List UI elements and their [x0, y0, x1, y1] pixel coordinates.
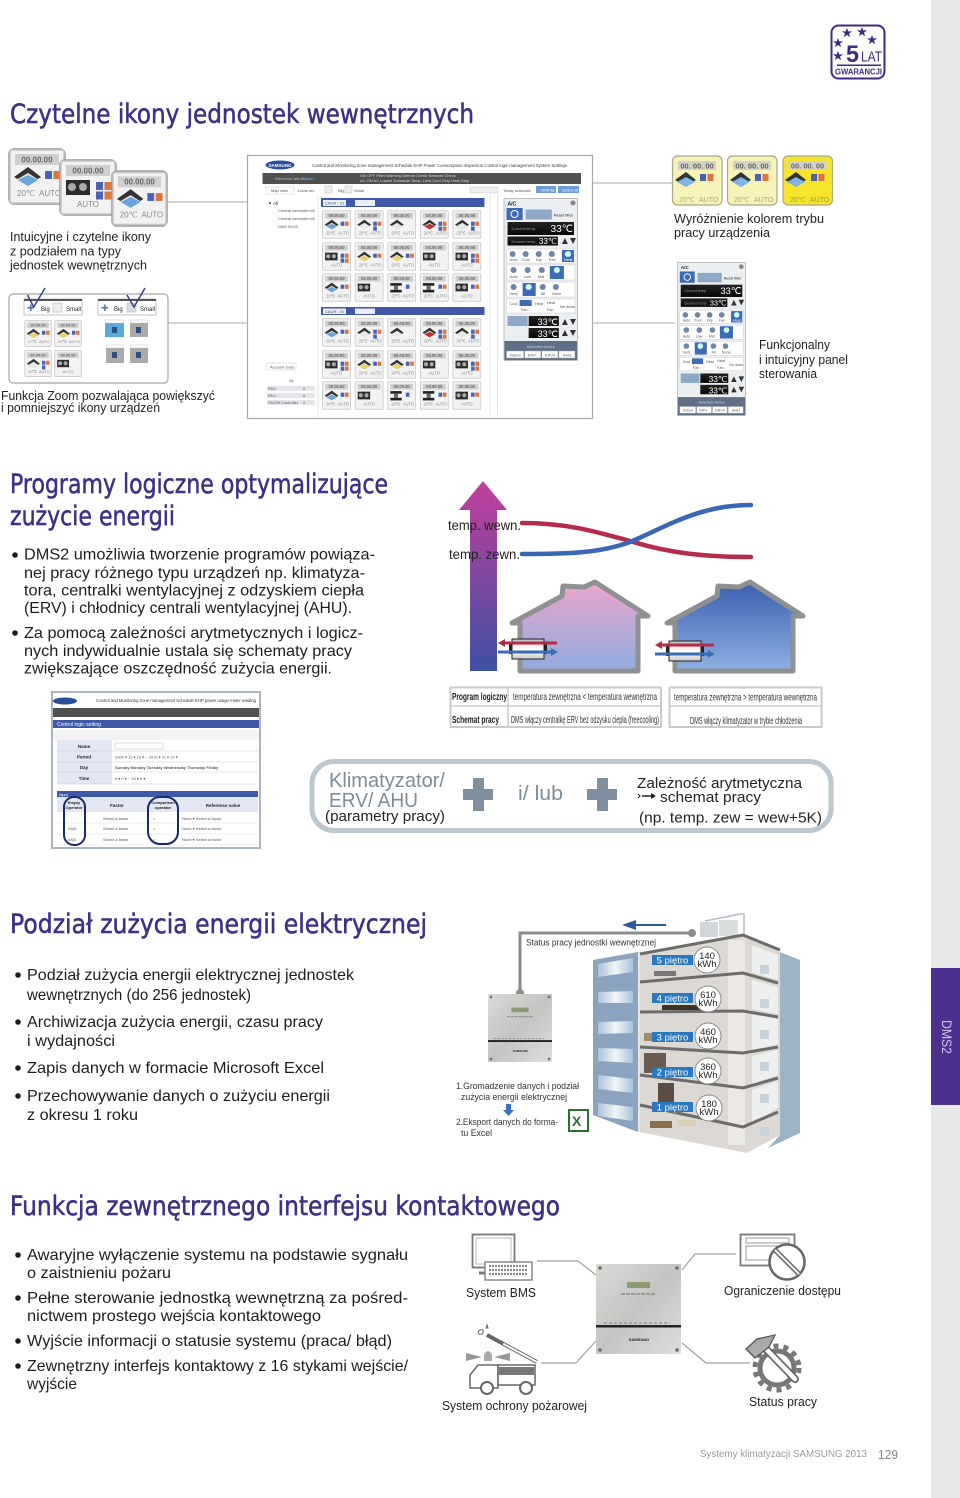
main software window screenshot: SAMSUNG [268, 163, 292, 168]
icon: plus [587, 778, 617, 811]
colour mode cards: AUTO [699, 197, 719, 204]
kWh values: kWh [698, 1070, 718, 1081]
main software window screenshot: All [289, 378, 294, 383]
text block: contact interface: o zaistnieniu pożaru [27, 1265, 171, 1282]
connector lines: interface [537, 1254, 750, 1363]
caption: indoor unit icons: jednostek wewnętrznych [9, 258, 147, 272]
kWh values: 610 [700, 990, 716, 1001]
screenshot: control logic settings: Period [77, 754, 91, 760]
kWh values: kWh [698, 998, 718, 1009]
label: status: Status pracy jednostki wewnętrznej [526, 938, 656, 948]
label: temp. zewn.: temp. zewn. [449, 546, 520, 562]
connector lines [168, 183, 675, 323]
screenshot: control logic settings: Select a factor [103, 816, 129, 821]
screenshot: control logic settings: AND [68, 826, 77, 831]
text: data steps [456, 1081, 579, 1138]
DMS controller device [488, 994, 552, 1062]
colour mode cards: 20℃ [734, 197, 750, 204]
text: Klimatyzator [325, 770, 445, 825]
main software window screenshot: Big [338, 188, 344, 193]
zoom function box: Big [114, 307, 123, 313]
footer: Systemy klimatyzacji SAMSUNG 2013 [700, 1448, 867, 1460]
main software window screenshot: CAUR - 01 [325, 200, 345, 206]
main software window screenshot: Central controller<00 [278, 216, 316, 221]
text block: logic programs: (ERV) i chłodnicy centrali wentylacyjnej (AHU). [24, 600, 352, 617]
caption: control panel: Funkcjonalny [759, 337, 830, 352]
main software window screenshot: 2 [303, 400, 306, 405]
building with floors [593, 914, 800, 1153]
main software window screenshot: Account tools [270, 364, 294, 370]
kWh values: 180 [701, 1099, 717, 1110]
section tab: DMS2 [931, 968, 960, 1105]
screenshot: control logic settings: Day [80, 765, 89, 770]
text block: logic programs: nych indywidualnie ustala się schematy pracy [24, 643, 352, 660]
house: blue [655, 582, 803, 671]
screenshot: control logic settings: Operator [66, 805, 83, 810]
badge: 5 lat gwarancji: 5 [846, 41, 859, 68]
text block: energy split: Podział zużycia energii elektrycznej jednostek [27, 967, 355, 984]
heading: Czytelne ikony: Czytelne ikony jednostek wewnętrznych [10, 99, 474, 130]
floor labels [652, 955, 693, 1114]
caption: control panel: sterowania [759, 366, 818, 381]
icon: excel [569, 1110, 588, 1131]
caption: indoor unit icons: z podziałem na typy [10, 244, 121, 258]
colour mode cards: 00. 00. 00 [680, 162, 714, 170]
text block: contact interface: Wyjście informacji o statusie systemu (praca/ błąd) [27, 1333, 392, 1350]
heading: Funkcja zewnętrznego: Funkcja zewnętrznego interfejsu kontaktowego [10, 1191, 560, 1222]
caption: zoom [1, 388, 215, 415]
text block: energy split: Archiwizacja zużycia energii, czasu pracy [27, 1014, 323, 1031]
screenshot: control logic settings: Time [79, 776, 90, 781]
heading: Programy logiczne [10, 469, 388, 532]
floor labels: 4 piętro [657, 994, 688, 1004]
text block: energy split: wewnętrznych (do 256 jednostek) [26, 987, 251, 1004]
table: logic program right: DMS włączy klimatyzator w trybie chłodzenia [690, 716, 802, 727]
main software window screenshot [248, 156, 592, 418]
kWh values: kWh [700, 1107, 718, 1118]
screenshot: control logic settings: Sunday Monday Tuesday Wednesday Thursday Friday [115, 765, 219, 770]
text block: contact interface: Awaryjne wyłączenie systemu na podstawie sygnału [27, 1247, 408, 1264]
control panel screenshot [677, 262, 746, 416]
screenshot: control logic settings: None ▾ Select a factor [182, 826, 222, 831]
text: arithmetic relation: (np. temp. zew = wew+5K) [639, 810, 822, 826]
icon: access restriction [740, 1234, 804, 1280]
main software window screenshot: Local rec. [298, 188, 315, 193]
text block: contact interface: wyjście [26, 1376, 77, 1393]
badge: 5 lat gwarancji: GWARANCJI [835, 68, 882, 76]
icon: BMS computer [472, 1234, 532, 1280]
caption: control panel: i intuicyjny panel [759, 352, 848, 367]
main software window screenshot: On/Off Controller [268, 400, 299, 405]
caption: colour modes: pracy urządzenia [674, 225, 771, 240]
screenshot: control logic settings: None ▾ Select a factor [182, 837, 222, 842]
screenshot: control logic settings: Name [78, 744, 91, 749]
zoom function box [9, 288, 168, 383]
label: temp. wewn.: temp. wewn. [448, 517, 521, 533]
house: pink [498, 582, 648, 671]
floor labels: 3 piętro [657, 1032, 688, 1044]
screenshot: control logic settings: None ▾ Select a factor [182, 816, 222, 821]
zoom function box: ✚ [27, 303, 35, 313]
table: logic program right [669, 688, 822, 727]
main software window screenshot: Station [302, 176, 314, 181]
arrow: temperature axis [459, 481, 507, 671]
screenshot: control logic settings: 2300 ▾ 11 ▾ 19 ▾ ~ 2016 ▾ 11 ▾ 19 ▾ [115, 754, 178, 760]
colour mode cards: 20℃ [790, 197, 806, 204]
text: data steps: 2.Eksport danych do forma- [456, 1117, 558, 1127]
main software window screenshot: Select all [562, 188, 578, 192]
heading: Podział zużycia: Podział zużycia energii elektrycznej [10, 909, 427, 940]
kWh values: 140 [699, 951, 715, 962]
text: Klimatyzator: Klimatyzator/ [329, 770, 445, 792]
screenshot: control logic settings: Input [59, 792, 69, 797]
text block: energy split: i wydajności [27, 1033, 115, 1050]
caption: colour modes: Wyróżnienie kolorem trybu [674, 211, 824, 226]
screenshot: control logic settings: Select a factor [103, 826, 129, 831]
text block: logic programs: Za pomocą zależności arytmetycznych i logicz- [24, 625, 363, 642]
kWh values: kWh [698, 959, 716, 970]
text block: logic programs: DMS2 umożliwia tworzenie programów powiąza- [24, 546, 375, 564]
label: System ochrony pożarowej: System ochrony pożarowej [442, 1398, 587, 1413]
text block: logic programs: tora, centralki wentylacyjnej z odzyskiem ciepła [24, 582, 364, 600]
kWh values: kWh [698, 1035, 718, 1046]
table: logic program left [450, 687, 661, 727]
screenshot: control logic settings: AND [68, 837, 77, 842]
screenshot: control logic settings: Control logic setting [57, 722, 101, 728]
table: logic program left: temperatura zewnętrzna < temperatura wewnętrzna [513, 692, 657, 703]
label: Ograniczenie dostępu: Ograniczenie dostępu [724, 1283, 841, 1298]
zoom function box: Big [41, 307, 50, 313]
main software window screenshot: Shift All [541, 188, 554, 192]
text block: energy split: Przechowywanie danych o zużyciu energii [27, 1088, 330, 1105]
main software window screenshot: Welcome! admin [275, 176, 305, 181]
text block: logic programs [12, 546, 375, 678]
icon: plus [463, 778, 493, 811]
text block: contact interface: Pełne sterowanie jednostką wewnętrzną za pośred- [27, 1290, 408, 1307]
connection: status line [516, 920, 696, 997]
text: data steps: 1.Gromadzenie danych i podział [456, 1081, 579, 1091]
icon: excel: X [572, 1113, 582, 1129]
screenshot: control logic settings: = [153, 816, 156, 821]
zoom function box: ✚ [101, 303, 109, 313]
colour mode cards [672, 156, 832, 205]
screenshot: control logic settings: operator [155, 805, 172, 810]
caption: zoom: Funkcja Zoom pozwalająca powiększyć [1, 388, 215, 403]
text block: logic programs: nej pracy różnego typu urządzeń np. klimatyza- [24, 565, 365, 582]
main software window screenshot: RN-I [268, 393, 276, 398]
caption: colour modes [674, 211, 824, 240]
text: Klimatyzator: ERV/ AHU [329, 790, 418, 812]
text: data steps: tu Excel [461, 1128, 492, 1138]
main software window screenshot: ON OFF Filter Warning Defrost Check Network Check [360, 173, 456, 178]
icon: hammer and gear [746, 1335, 799, 1390]
kWh values: 360 [700, 1062, 716, 1073]
caption: indoor unit icons: Intuicyjne i czytelne ikony [10, 229, 151, 244]
main software window screenshot: 0 [303, 386, 306, 391]
main software window screenshot: RN-I [268, 386, 276, 391]
colour mode cards: AUTO [810, 197, 830, 204]
caption: zoom: i pomniejszyć ikony urządzeń [1, 400, 160, 415]
text: arithmetic relation [637, 775, 822, 826]
screenshot: control logic settings: Empty [68, 800, 81, 805]
text: Klimatyzator: (parametry pracy) [325, 808, 445, 825]
text: i/ lub: i/ lub [518, 783, 563, 805]
kWh values [694, 947, 722, 1121]
screenshot: control logic settings: Control and Monitoring Zone management Schedule EHP power usage meter reading [96, 698, 256, 703]
colour mode cards: AUTO [754, 197, 774, 204]
label: Status pracy: Status pracy [749, 1394, 817, 1409]
text block: contact interface: Zewnętrzny interfejs kontaktowy z 16 stykami wejście/ [27, 1358, 409, 1375]
text block: energy split: Zapis danych w formacie Microsoft Excel [27, 1060, 324, 1077]
screenshot: control logic settings: Reference value [206, 803, 241, 808]
screenshot: control logic settings: = [153, 837, 156, 842]
screenshot: control logic settings: Comparison [151, 800, 175, 805]
main software window screenshot: Today schedule [503, 188, 532, 193]
floor labels: 2 piętro [657, 1068, 688, 1078]
text block: energy split: z okresu 1 roku [27, 1107, 138, 1124]
heading: Programy logiczne: Programy logiczne optymalizujące [10, 469, 388, 500]
colour mode cards: 20℃ [679, 197, 695, 204]
icons: indoor unit cards [9, 149, 167, 226]
text block: energy split [15, 967, 355, 1124]
table: logic program right: temperatura zewnętrzna > temperatura wewnętrzna [674, 692, 817, 704]
main software window screenshot: 0 [303, 393, 306, 398]
section tab: DMS2: DMS2 [939, 1020, 955, 1054]
screenshot: control logic settings: Factor [110, 803, 124, 808]
label: System BMS: System BMS [466, 1285, 536, 1300]
screenshot: control logic settings [52, 692, 260, 848]
temperature curves [522, 505, 751, 557]
screenshot: control logic settings: = [153, 826, 156, 831]
colour mode cards: 00. 00. 00 [735, 162, 769, 170]
table: logic program left: Program logiczny [452, 692, 507, 703]
main software window screenshot: Small [354, 188, 364, 193]
screenshot: control logic settings: 0 ▾ 0 ▾ ~ 34 ▾ 6 ▾ [115, 776, 145, 781]
text: arithmetic relation: Zależność arytmetyczna [637, 775, 803, 792]
table: logic program left: Schemat pracy [452, 715, 499, 726]
icon: fire truck [466, 1325, 537, 1394]
kWh values: 460 [700, 1027, 716, 1038]
main software window screenshot: All [273, 201, 278, 206]
floor labels: 1 piętro [657, 1102, 688, 1114]
floor labels: 5 piętro [657, 956, 688, 966]
text: arithmetic relation: schemat pracy [660, 789, 762, 806]
badge: 5 lat gwarancji: LAT [861, 48, 882, 66]
zoom function box: Small [66, 307, 81, 313]
outdoor units [700, 914, 744, 937]
zoom function box: Small [140, 307, 155, 313]
text: data steps: zużycia energii elektrycznej [461, 1092, 567, 1102]
text block: logic programs: zwiększające oszczędność zużycia energii. [24, 660, 332, 678]
main software window screenshot: DMS 00:00 [278, 224, 299, 229]
badge: 5 lat gwarancji [832, 26, 884, 78]
main software window screenshot: Central controller<00 [278, 208, 316, 213]
main software window screenshot: AC ON AC Lowerl Schedule Temp. Limit Cool Only Heat Only [360, 178, 469, 183]
screenshot: control logic settings: Select a factor [103, 837, 129, 842]
heading: Programy logiczne: zużycie energii [10, 501, 175, 532]
main software window screenshot: Control and Monitoring Zone management Schedule EHP Power Consumption Inspection Control logic management System Settings [312, 163, 568, 168]
caption: indoor unit icons [9, 229, 151, 272]
footer: 129 [878, 1447, 898, 1462]
text block: contact interface [15, 1247, 409, 1393]
caption: control panel [759, 337, 848, 381]
main software window screenshot: CAUR - 01 [325, 309, 345, 314]
sidebar strip [931, 0, 960, 1498]
text block: contact interface: nictwem prostego wejścia kontaktowego [27, 1308, 321, 1325]
table: logic program left: DMS włączy centralkę ERV bez odzysku ciepła (freecooling) [511, 715, 659, 726]
colour mode cards: 00. 00. 00 [791, 162, 824, 170]
rounded box: formula [312, 762, 831, 830]
DMS device [596, 1264, 681, 1354]
main software window screenshot: Map view [271, 188, 288, 193]
